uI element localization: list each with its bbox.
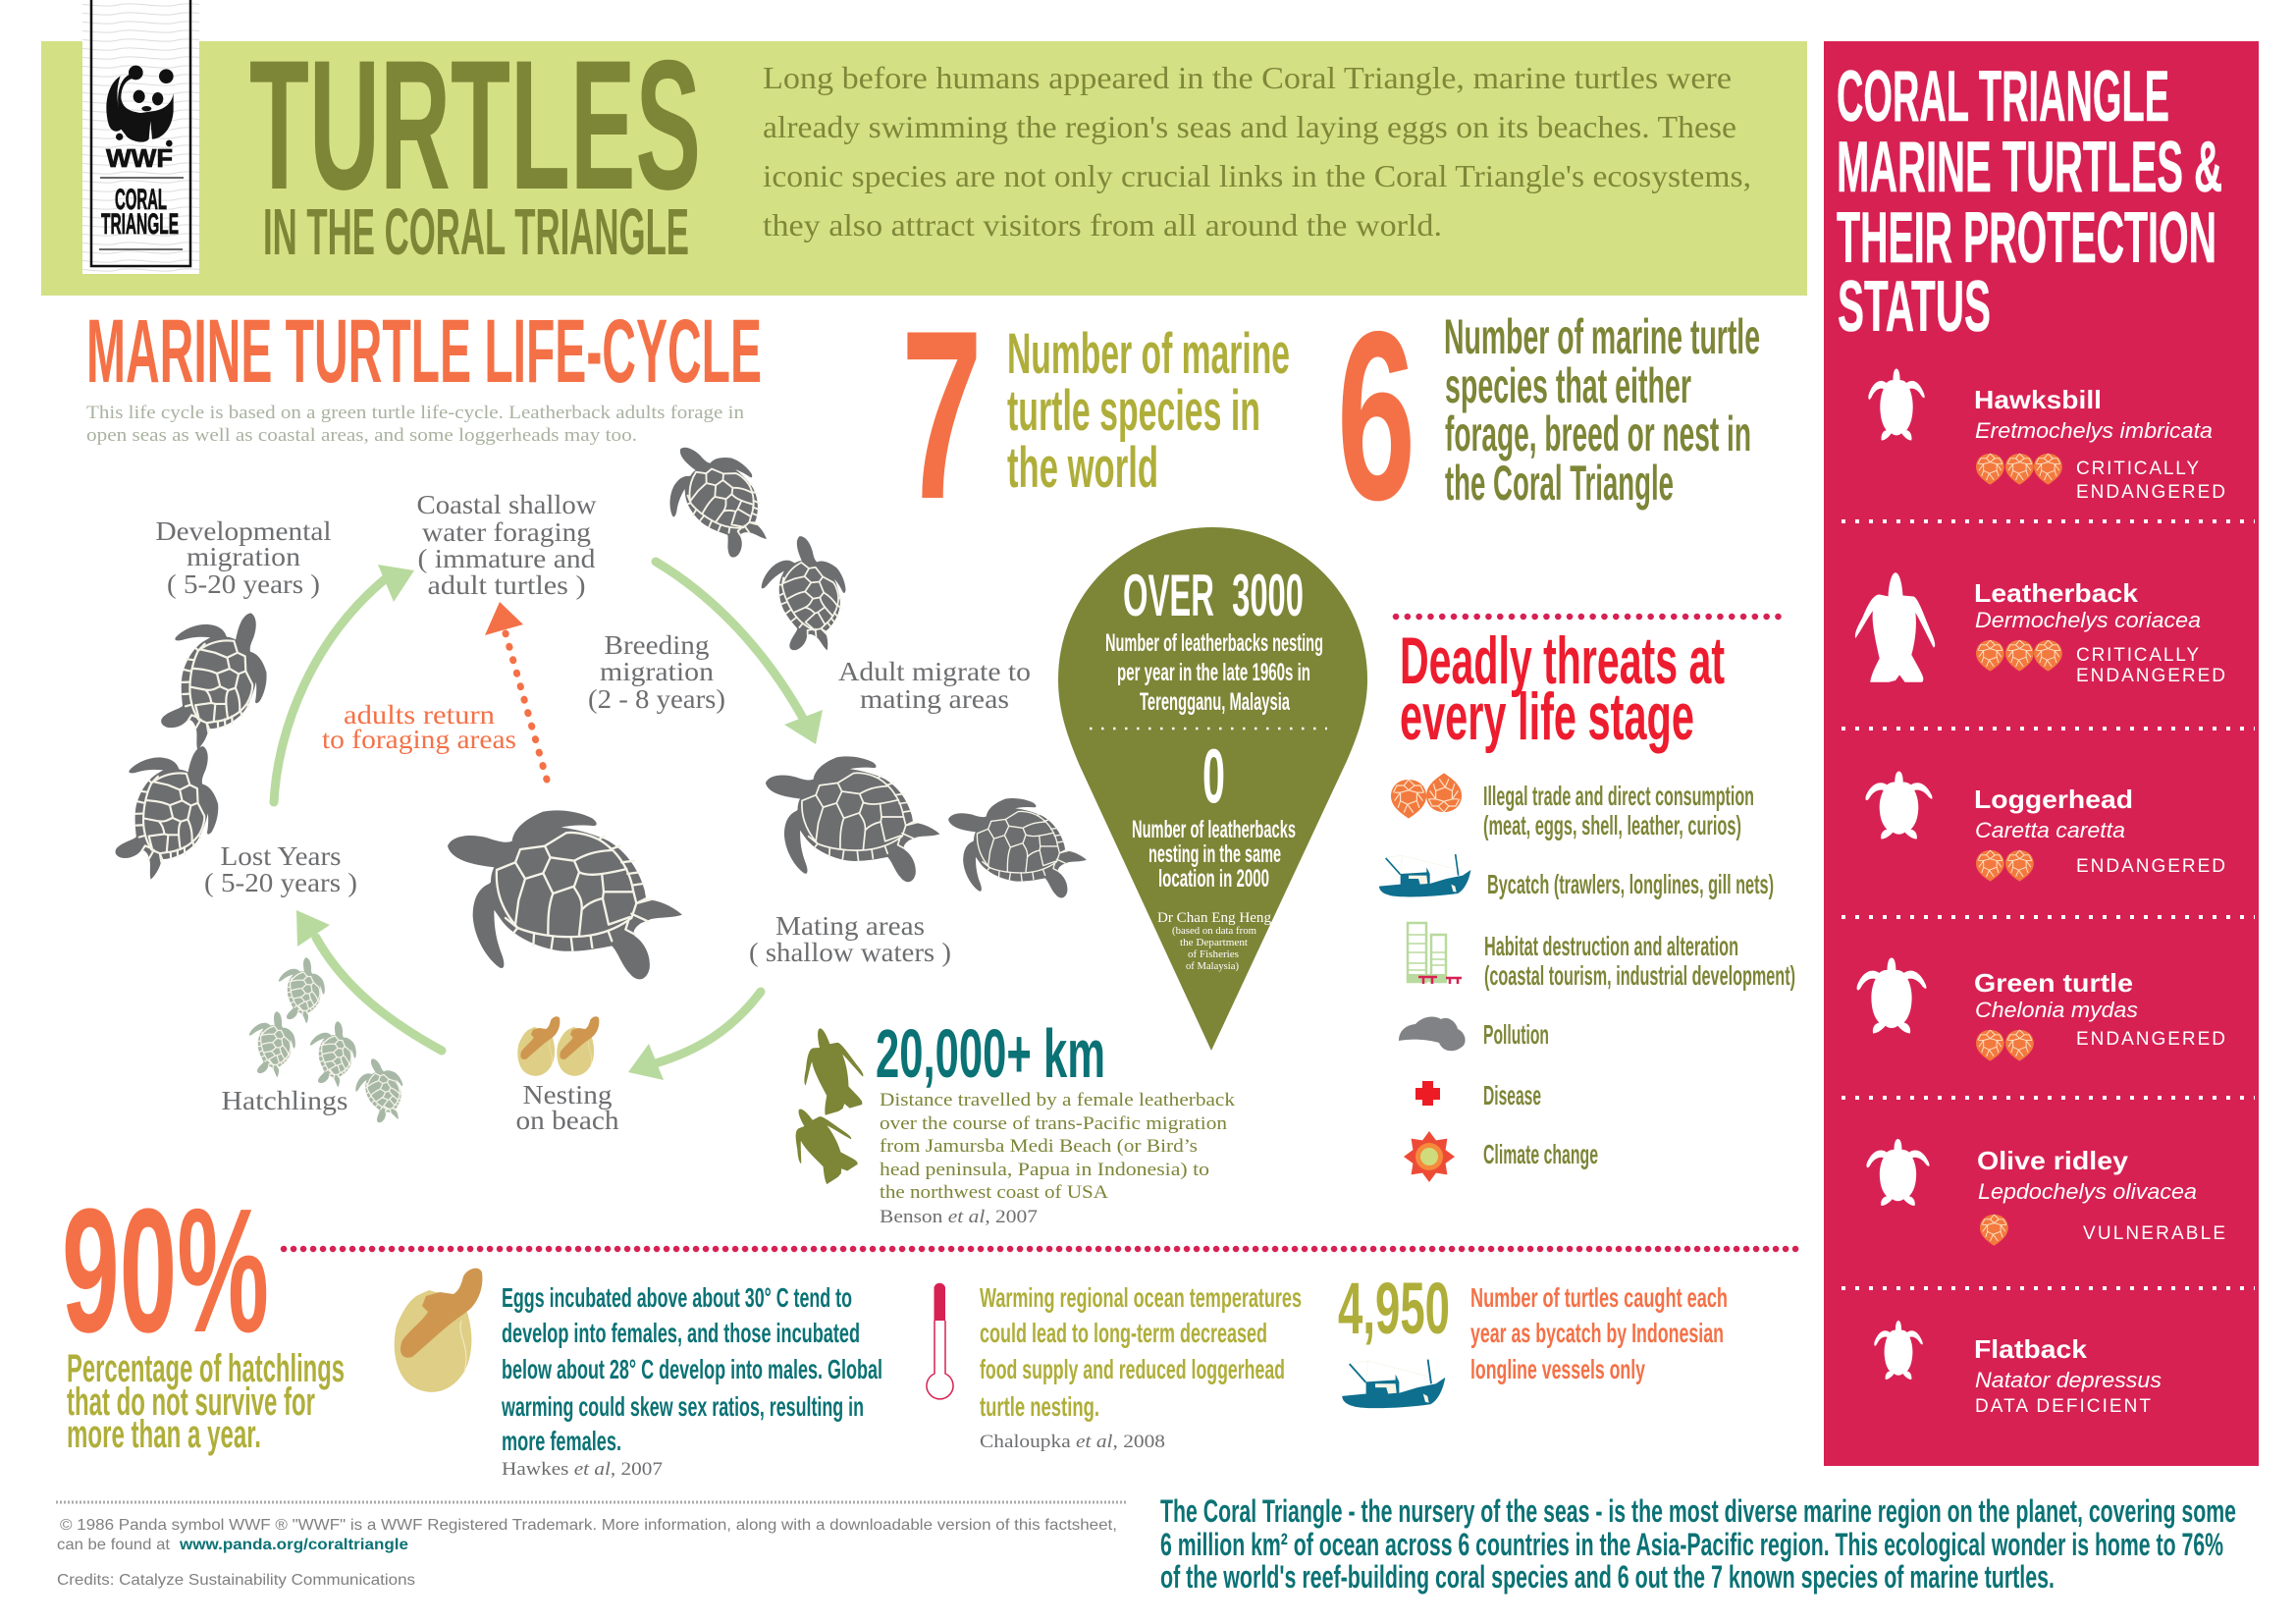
life-cycle note: This life cycle is based on a green turtle life-cycle. Leatherback adults forage in bbox=[86, 403, 745, 423]
hatchling 2 bbox=[242, 1008, 304, 1083]
stat: 4,950 bycatch: Number of turtles caught each bbox=[1470, 1282, 1728, 1313]
icon: panda bbox=[106, 66, 174, 146]
stat: 6 species: forage, breed or nest in bbox=[1445, 406, 1751, 461]
label: lost years: ( 5-20 years ) bbox=[204, 868, 357, 897]
life-cycle note bbox=[86, 403, 745, 446]
species: leatherback: CRITICALLY bbox=[2076, 645, 2199, 666]
label: coastal shallow water foraging: adult turtles ) bbox=[428, 570, 585, 600]
species: green turtle: Green turtle bbox=[1974, 968, 2133, 998]
turtle: developmental 2 bbox=[113, 739, 224, 885]
species: olive ridley: VULNERABLE bbox=[2083, 1223, 2225, 1244]
stat: 90 percent bbox=[62, 1172, 345, 1456]
turtle: developmental 1 bbox=[159, 606, 272, 755]
species: olive ridley: Olive ridley bbox=[1977, 1146, 2129, 1175]
arrow: adults return dotted bbox=[485, 602, 547, 780]
stat: 6 species: 6 bbox=[1337, 281, 1415, 550]
fact: warming oceans: food supply and reduced loggerhead bbox=[980, 1354, 1285, 1384]
stat: 90 percent: Percentage of hatchlings bbox=[67, 1347, 345, 1390]
stat: 90 percent: 90% bbox=[62, 1172, 269, 1370]
threat: bycatch: Bycatch (trawlers, longlines, gill nets) bbox=[1487, 869, 1774, 899]
fact: warming oceans: Warming regional ocean temperatures bbox=[980, 1282, 1302, 1313]
fact: egg incubation: below about 28° C develop into males. Global bbox=[502, 1354, 882, 1384]
species: flatback: Flatback bbox=[1974, 1334, 2088, 1364]
icon: nesting eggs bbox=[517, 1016, 599, 1076]
intro paragraph bbox=[763, 60, 1751, 243]
label: lost years bbox=[204, 841, 357, 897]
icon: egg bbox=[395, 1269, 482, 1392]
icon: cloud bbox=[1399, 1017, 1466, 1051]
stat: 6 species: the Coral Triangle bbox=[1445, 456, 1674, 511]
deadly threats heading: every life stage bbox=[1400, 679, 1694, 754]
title: TURTLES bbox=[249, 22, 701, 228]
species: hawksbill bbox=[1868, 369, 2225, 503]
heading: marine turtle life-cycle: MARINE TURTLE LIFE-CYCLE bbox=[86, 301, 762, 402]
stat: 7 species: Number of marine bbox=[1007, 322, 1290, 386]
fact: warming oceans: Chaloupka et al, 2008 bbox=[980, 1432, 1165, 1452]
panel heading bbox=[1837, 57, 2222, 347]
label: hatchlings: Hatchlings bbox=[222, 1086, 347, 1115]
threat: disease: Disease bbox=[1483, 1080, 1541, 1110]
logo: WWF Coral Triangle: WWF bbox=[106, 143, 173, 173]
stat: 20,000 km migration: the northwest coast of USA bbox=[880, 1182, 1108, 1203]
species: green turtle: Chelonia mydas bbox=[1975, 998, 2138, 1022]
leatherback pin bbox=[1058, 527, 1367, 1051]
species: leatherback: Dermochelys coriacea bbox=[1975, 608, 2201, 632]
label: developmental migration: ( 5-20 years ) bbox=[167, 569, 320, 599]
icon: boat bbox=[1342, 1360, 1445, 1408]
leatherback pin: nesting in the same bbox=[1148, 840, 1281, 868]
label: mating areas: Mating areas bbox=[775, 911, 925, 941]
species: flatback bbox=[1874, 1321, 2162, 1417]
logo: WWF Coral Triangle: TRIANGLE bbox=[101, 208, 179, 241]
stat: 20,000 km migration: Distance travelled by a female leatherback bbox=[880, 1090, 1236, 1110]
icon: boat bbox=[1379, 854, 1470, 896]
fact: egg incubation: warming could skew sex ratios, resulting in bbox=[501, 1391, 864, 1422]
label: breeding migration bbox=[588, 630, 725, 714]
arrow: lost years to coastal bbox=[274, 565, 414, 802]
deadly threats heading: Deadly threats at bbox=[1400, 623, 1725, 698]
threat: pollution bbox=[1399, 1017, 1549, 1051]
label: nesting on beach: Nesting bbox=[522, 1080, 613, 1110]
stat: 20,000 km migration bbox=[775, 1015, 1236, 1227]
fact: egg incubation: Hawkes et al, 2007 bbox=[502, 1459, 663, 1480]
title: IN THE CORAL TRIANGLE bbox=[263, 195, 689, 269]
stat: 4,950 bycatch bbox=[1338, 1268, 1728, 1408]
icon: leatherbacks bbox=[775, 1020, 871, 1190]
label: adults return bbox=[322, 700, 516, 754]
species: green turtle bbox=[1857, 958, 2225, 1061]
leatherback pin: of Fisheries bbox=[1188, 948, 1239, 960]
stat: 7 species bbox=[901, 280, 1290, 549]
species: green turtle: ENDANGERED bbox=[2076, 1029, 2225, 1050]
label: breeding migration: migration bbox=[600, 657, 715, 686]
label: lost years: Lost Years bbox=[220, 841, 342, 871]
logo: WWF Coral Triangle bbox=[82, 0, 199, 274]
panel: protection status bbox=[1824, 41, 2259, 1466]
stat: 20,000 km migration: from Jamursba Medi Beach (or Bird’s bbox=[880, 1136, 1198, 1157]
leatherback pin: Dr Chan Eng Heng bbox=[1157, 910, 1271, 926]
arrow: coastal to mating bbox=[656, 562, 823, 744]
threat: illegal trade: (meat, eggs, shell, leather, curios) bbox=[1483, 810, 1741, 840]
label: adult migrate: mating areas bbox=[860, 684, 1009, 714]
threat: habitat destruction: Habitat destruction and alteration bbox=[1484, 931, 1738, 961]
species: hawksbill: Hawksbill bbox=[1974, 385, 2102, 414]
stat: 4,950 bycatch: longline vessels only bbox=[1470, 1354, 1645, 1384]
label: adult migrate bbox=[838, 657, 1031, 714]
species: loggerhead: Loggerhead bbox=[1974, 785, 2133, 814]
stat: 4,950 bycatch: year as bycatch by Indonesian bbox=[1470, 1318, 1724, 1348]
life-cycle note: open seas as well as coastal areas, and some loggerheads may too. bbox=[86, 425, 637, 446]
stat: 6 species: species that either bbox=[1445, 358, 1691, 413]
species: hawksbill: Eretmochelys imbricata bbox=[1975, 418, 2213, 443]
deadly threats heading bbox=[1396, 617, 1789, 754]
turtle: migrating adult 2 bbox=[744, 528, 871, 666]
coral triangle statement bbox=[1160, 1493, 2236, 1595]
species: loggerhead: Caretta caretta bbox=[1975, 818, 2125, 842]
stat: 4,950 bycatch: 4,950 bbox=[1338, 1268, 1450, 1349]
label: adult migrate: Adult migrate to bbox=[838, 657, 1031, 686]
species: loggerhead bbox=[1866, 772, 2225, 882]
icon: thermometer bbox=[927, 1283, 953, 1399]
title bbox=[249, 22, 701, 269]
stat: 20,000 km migration: Benson et al, 2007 bbox=[880, 1207, 1038, 1227]
threat: habitat destruction: (coastal tourism, industrial development) bbox=[1484, 960, 1795, 991]
species: flatback: DATA DEFICIENT bbox=[1975, 1396, 2151, 1417]
threat: climate change: Climate change bbox=[1483, 1139, 1598, 1169]
arrow: hatchlings to lost years bbox=[296, 910, 442, 1051]
threat: bycatch bbox=[1379, 854, 1774, 899]
species: leatherback bbox=[1855, 572, 2225, 686]
stat: 20,000 km migration: over the course of trans-Pacific migration bbox=[880, 1113, 1228, 1134]
label: adults return: to foraging areas bbox=[322, 725, 516, 754]
turtle: mating pair 2 bbox=[948, 798, 1087, 897]
label: coastal shallow water foraging: ( immature and bbox=[418, 544, 596, 573]
species: leatherback: ENDANGERED bbox=[2076, 666, 2225, 686]
turtle: migrating adult 1 bbox=[647, 433, 793, 568]
leatherback pin: the Department bbox=[1180, 937, 1248, 948]
header banner bbox=[41, 41, 1807, 296]
stat: 6 species bbox=[1337, 281, 1760, 550]
fact: egg incubation: Eggs incubated above about 30° C tend to bbox=[502, 1282, 852, 1313]
label: developmental migration: migration bbox=[187, 542, 301, 571]
leatherback pin: of Malaysia) bbox=[1186, 960, 1239, 972]
stat: 20,000 km migration: 20,000+ km bbox=[876, 1015, 1105, 1092]
threat: habitat destruction bbox=[1407, 923, 1795, 991]
species: loggerhead: ENDANGERED bbox=[2076, 856, 2225, 877]
icon: buildings bbox=[1407, 923, 1462, 984]
stat: 7 species: 7 bbox=[901, 280, 983, 549]
stat: zero: 0 bbox=[1202, 732, 1225, 819]
intro paragraph: iconic species are not only crucial links in the Coral Triangle's ecosystems, bbox=[763, 158, 1751, 193]
fact: warming oceans bbox=[927, 1282, 1302, 1452]
fact: egg incubation: develop into females, and those incubated bbox=[502, 1318, 860, 1348]
leatherback pin: Number of leatherbacks nesting bbox=[1105, 629, 1323, 657]
stat: 90 percent: that do not survive for bbox=[67, 1380, 315, 1424]
label: breeding migration: (2 - 8 years) bbox=[588, 684, 725, 714]
panel heading: STATUS bbox=[1838, 267, 1991, 347]
life cycle diagram bbox=[113, 433, 1087, 1135]
species: leatherback: Leatherback bbox=[1974, 578, 2139, 608]
footer credits bbox=[56, 1502, 1126, 1589]
icon: cross bbox=[1415, 1081, 1440, 1106]
label: coastal shallow water foraging bbox=[416, 490, 597, 600]
stat: 6 species: Number of marine turtle bbox=[1444, 309, 1760, 364]
icon: sun bbox=[1404, 1131, 1455, 1182]
species: flatback: Natator depressus bbox=[1975, 1368, 2162, 1392]
leatherback pin: Number of leatherbacks bbox=[1132, 816, 1296, 843]
label: adults return: adults return bbox=[344, 700, 496, 730]
fact: warming oceans: could lead to long-term decreased bbox=[980, 1318, 1267, 1348]
leatherback pin: per year in the late 1960s in bbox=[1117, 659, 1310, 686]
threat: illegal trade: Illegal trade and direct consumption bbox=[1483, 781, 1754, 811]
leatherback pin: (based on data from bbox=[1172, 925, 1256, 937]
stat: 20,000 km migration: head peninsula, Papua in Indonesia) to bbox=[880, 1160, 1209, 1180]
icon: shells bbox=[1391, 773, 1462, 819]
stat: 7 species: the world bbox=[1007, 436, 1158, 500]
threat: climate change bbox=[1404, 1131, 1598, 1182]
hatchling 1 bbox=[272, 954, 334, 1029]
stat: 90 percent: more than a year. bbox=[67, 1413, 261, 1456]
footer credits: can be found at bbox=[57, 1537, 171, 1553]
hatchling 4 bbox=[345, 1053, 420, 1131]
turtle: mating pair 1 bbox=[766, 756, 939, 882]
stat: 7 species: turtle species in bbox=[1007, 379, 1260, 443]
fact: warming oceans: turtle nesting. bbox=[980, 1391, 1099, 1422]
threat: pollution: Pollution bbox=[1483, 1019, 1549, 1050]
leatherback pin: Terengganu, Malaysia bbox=[1140, 688, 1291, 716]
fact: egg incubation bbox=[395, 1269, 882, 1480]
turtle: large nesting adult bbox=[448, 810, 682, 979]
label: coastal shallow water foraging: water foraging bbox=[422, 517, 591, 547]
label: mating areas bbox=[749, 911, 951, 967]
stat: over 3000: OVER 3000 bbox=[1123, 563, 1304, 628]
leatherback pin: location in 2000 bbox=[1158, 865, 1269, 893]
hatchling 3 bbox=[303, 1018, 365, 1093]
species: hawksbill: ENDANGERED bbox=[2076, 482, 2225, 503]
label: developmental migration bbox=[155, 516, 332, 599]
species: olive ridley: Lepdochelys olivacea bbox=[1978, 1179, 2197, 1204]
label: mating areas: ( shallow waters ) bbox=[749, 938, 951, 967]
fact: egg incubation: more females. bbox=[502, 1426, 621, 1456]
footer credits: © 1986 Panda symbol WWF ® "WWF" is a WWF Registered Trademark. More information, along with a downloadable version of this factsheet, bbox=[60, 1517, 1117, 1534]
species: hawksbill: CRITICALLY bbox=[2076, 459, 2199, 479]
label: nesting on beach bbox=[516, 1080, 619, 1135]
logo: WWF Coral Triangle: CORAL bbox=[115, 184, 167, 216]
footer credits: www.panda.org/coraltriangle bbox=[179, 1537, 408, 1553]
label: developmental migration: Developmental bbox=[155, 516, 332, 546]
threat: illegal trade bbox=[1391, 773, 1754, 840]
threat: disease bbox=[1415, 1080, 1541, 1110]
intro paragraph: Long before humans appeared in the Coral Triangle, marine turtles were bbox=[763, 60, 1732, 95]
intro paragraph: already swimming the region's seas and laying eggs on its beaches. These bbox=[763, 109, 1736, 144]
label: nesting on beach: on beach bbox=[516, 1106, 619, 1135]
species: olive ridley bbox=[1866, 1139, 2225, 1246]
intro paragraph: they also attract visitors from all around the world. bbox=[763, 207, 1442, 243]
footer credits: Credits: Catalyze Sustainability Communications bbox=[57, 1572, 415, 1589]
label: coastal shallow water foraging: Coastal shallow bbox=[416, 490, 597, 519]
label: breeding migration: Breeding bbox=[605, 630, 709, 660]
arrow: mating to nesting bbox=[628, 992, 761, 1080]
